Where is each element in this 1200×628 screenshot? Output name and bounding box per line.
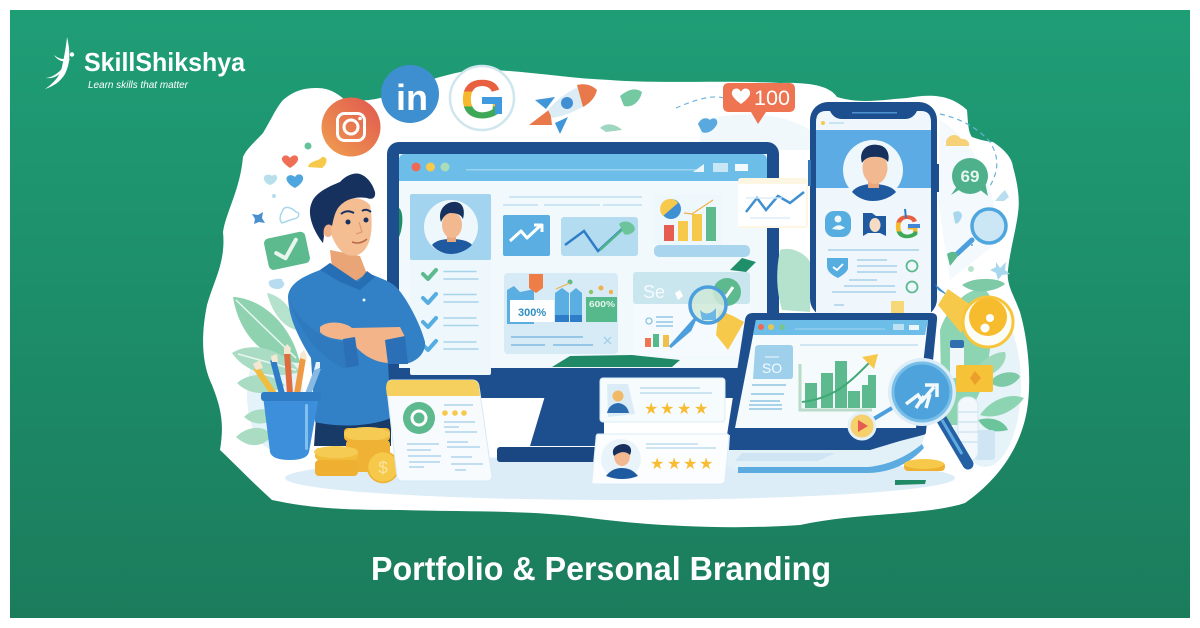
cup bbox=[263, 396, 319, 460]
phone bbox=[808, 102, 939, 317]
icon: LinkedIn: in bbox=[396, 77, 428, 118]
white cloud backdrop bbox=[203, 70, 1029, 527]
review card top: ★ bbox=[660, 401, 674, 418]
pencil cup bbox=[253, 344, 321, 460]
dollar coin bbox=[368, 452, 398, 482]
panel: 300% and 600% growth bbox=[504, 273, 618, 354]
600% label: 600% bbox=[589, 299, 616, 309]
SO tile bbox=[753, 345, 793, 379]
review card bottom: ★ bbox=[667, 456, 681, 473]
pencils bbox=[256, 352, 318, 394]
review card top: ★ bbox=[644, 401, 658, 418]
gold coins: $ bbox=[378, 458, 388, 477]
tile: line chart bbox=[561, 217, 638, 256]
small magnifier bbox=[947, 209, 1006, 266]
icon: Google: G bbox=[461, 68, 503, 130]
crossed arms bbox=[288, 296, 408, 368]
title: Portfolio & Personal Branding bbox=[371, 550, 831, 587]
review card top bbox=[600, 378, 725, 422]
review card bottom: ★ bbox=[650, 456, 664, 473]
bottle and box bbox=[950, 340, 995, 461]
gold coins bbox=[314, 427, 398, 482]
icon: Instagram bbox=[322, 98, 380, 156]
bar chart with arrow bbox=[800, 354, 878, 410]
soft light-blue wash behind scene bbox=[247, 114, 1021, 500]
review card top: ★ bbox=[677, 401, 691, 418]
green notch in desk bbox=[895, 480, 926, 485]
hair bbox=[310, 173, 375, 243]
review card bottom: ★ bbox=[699, 456, 713, 473]
plants right bbox=[777, 249, 1024, 431]
icon: LinkedIn bbox=[381, 65, 439, 123]
phone list bbox=[827, 250, 919, 313]
header lines bbox=[503, 197, 642, 205]
monitor base bbox=[497, 447, 607, 462]
trousers bbox=[314, 418, 391, 446]
panel: SEO card bbox=[633, 272, 750, 356]
review card bottom: ★ bbox=[683, 456, 697, 473]
icon: Google bbox=[450, 66, 514, 130]
panel: SEO card: Se bbox=[643, 282, 665, 302]
floating mini chart card bbox=[738, 178, 808, 228]
review card top: ★ bbox=[694, 401, 708, 418]
icon: magnifier on SEO card bbox=[670, 278, 744, 350]
green gaps in screen bbox=[399, 208, 402, 237]
checklist bbox=[423, 270, 478, 350]
laptop bbox=[725, 313, 937, 473]
chat bubble bbox=[951, 158, 988, 196]
logo mark: leaping figure bbox=[45, 37, 74, 89]
gold tag bbox=[956, 365, 993, 392]
floating icons right bbox=[940, 114, 1010, 280]
panel: profile card bbox=[410, 194, 491, 375]
tile: trend up bbox=[503, 215, 550, 256]
avatar bbox=[424, 200, 478, 254]
browser title bar bbox=[399, 154, 767, 181]
logo wordmark: SkillShikshya bbox=[84, 47, 246, 77]
gold coin on desk bbox=[904, 459, 945, 471]
play button bbox=[849, 408, 892, 439]
neck bbox=[330, 250, 367, 284]
monitor bbox=[387, 142, 808, 462]
keyboard bbox=[729, 435, 923, 450]
like counter bubble: 100 bbox=[754, 87, 790, 110]
monitor screen bbox=[399, 154, 767, 368]
ear bbox=[323, 223, 333, 237]
gold badge with pointer bbox=[935, 284, 1013, 347]
plants left bbox=[232, 293, 300, 445]
logo tagline: Learn skills that matter bbox=[88, 79, 188, 91]
collar bbox=[320, 263, 375, 290]
300% label: 300% bbox=[518, 307, 546, 319]
phone app icons: G bbox=[895, 209, 919, 245]
icon: green check badge bbox=[263, 231, 311, 271]
resume card bbox=[386, 380, 492, 481]
shirt bbox=[288, 263, 425, 425]
chat bubble: 69 bbox=[961, 167, 979, 186]
face bbox=[341, 210, 371, 243]
SO tile: SO bbox=[762, 360, 782, 376]
review card bottom bbox=[592, 434, 729, 484]
large magnifier bbox=[888, 358, 968, 464]
like counter bubble bbox=[723, 83, 795, 124]
phone screen bbox=[816, 111, 931, 317]
laptop base bbox=[725, 434, 925, 470]
floating decor above monitor bbox=[600, 89, 724, 133]
laptop lid bbox=[727, 313, 937, 435]
monitor frame bbox=[387, 142, 779, 398]
logo: SkillShikshya bbox=[45, 37, 246, 91]
phone app icons bbox=[825, 209, 920, 245]
man with crossed arms bbox=[288, 173, 425, 446]
icon: rocket bbox=[529, 84, 597, 134]
floating icons left: hearts and badges bbox=[252, 142, 326, 289]
phone body bbox=[810, 102, 937, 317]
monitor stand bbox=[530, 396, 604, 446]
phone avatar bbox=[843, 140, 903, 201]
tile: bar and pie chart bbox=[654, 195, 750, 257]
laptop screen bbox=[735, 320, 928, 428]
head bbox=[331, 198, 372, 256]
